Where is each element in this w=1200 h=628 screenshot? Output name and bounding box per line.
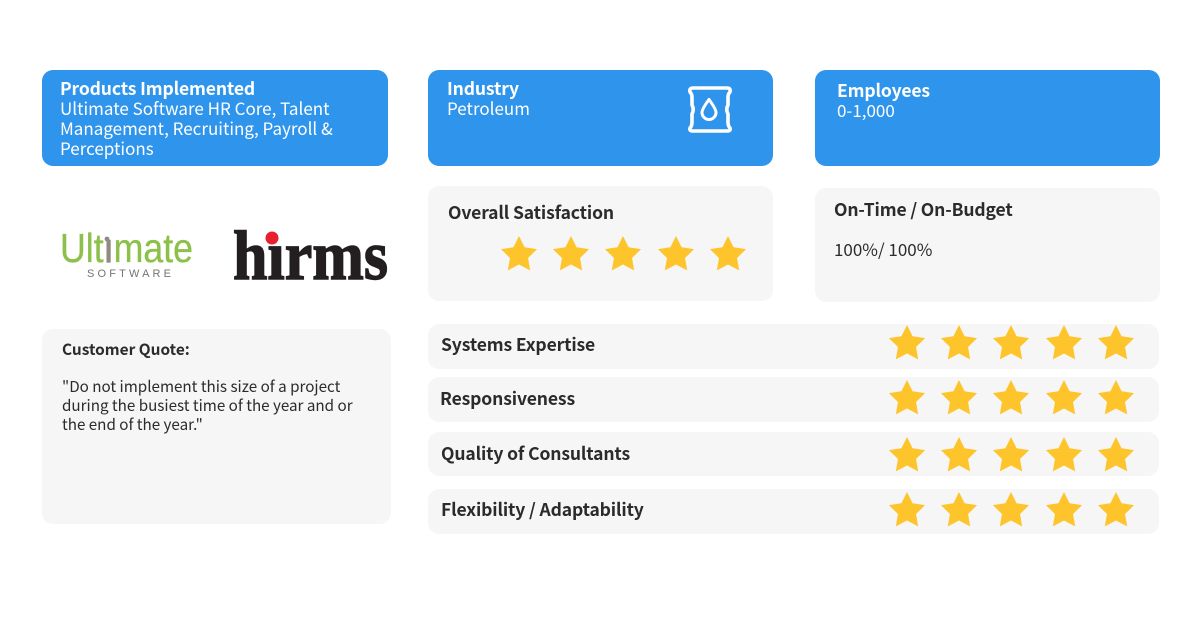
- text: products list: [60, 95, 333, 160]
- heading: customer quote: Customer Quote:: [62, 338, 190, 360]
- heading: products implemented: Products Implemented: [60, 76, 255, 101]
- panel: industry: [428, 70, 773, 166]
- icon: oil barrel: [688, 86, 732, 133]
- panel: on-time / on-budget: [815, 188, 1160, 302]
- label: responsiveness: Responsiveness: [440, 386, 575, 411]
- label: flexibility / adaptability: Flexibility / Adaptability: [441, 497, 644, 522]
- text: quote: [62, 375, 353, 435]
- rating: responsiveness stars: [889, 380, 1134, 414]
- rating: quality of consultants stars: [889, 437, 1134, 472]
- rating: systems expertise stars: [889, 325, 1134, 360]
- text: on-time percentages: 100%/ 100%: [834, 236, 932, 261]
- row: responsiveness: [428, 377, 1159, 422]
- heading: overall satisfaction: Overall Satisfaction: [448, 200, 614, 225]
- text: employee count: 0-1,000: [837, 97, 895, 122]
- row: quality of consultants: [428, 432, 1159, 476]
- label: quality of consultants: Quality of Consultants: [441, 441, 630, 466]
- rating: overall satisfaction stars: [501, 236, 746, 270]
- panel: products implemented: [42, 70, 388, 166]
- text: products list: Perceptions: [60, 135, 154, 160]
- logo: Ultimate Software: SOFTWARE: [87, 268, 171, 280]
- text: products list: Management, Recruiting, Payroll &: [60, 115, 333, 140]
- panel: overall satisfaction: [428, 186, 773, 301]
- text: products list: Ultimate Software HR Core, Talent: [60, 95, 330, 120]
- row: systems expertise: [428, 324, 1159, 369]
- panel: customer quote: [42, 329, 391, 524]
- rating: flexibility / adaptability stars: [889, 492, 1134, 526]
- text: quote: during the busiest time of the year and or: [62, 394, 353, 416]
- panel: employees: [815, 70, 1160, 166]
- heading: on-time / on-budget: On-Time / On-Budget: [834, 197, 1013, 222]
- label: systems expertise: Systems Expertise: [441, 332, 595, 357]
- text: quote: "Do not implement this size of a project: [62, 375, 340, 397]
- text: petroleum: Petroleum: [447, 95, 530, 120]
- heading: industry: Industry: [447, 76, 519, 101]
- heading: employees: Employees: [837, 78, 930, 103]
- row: flexibility / adaptability: [428, 489, 1159, 534]
- text: quote: the end of the year.": [62, 413, 203, 435]
